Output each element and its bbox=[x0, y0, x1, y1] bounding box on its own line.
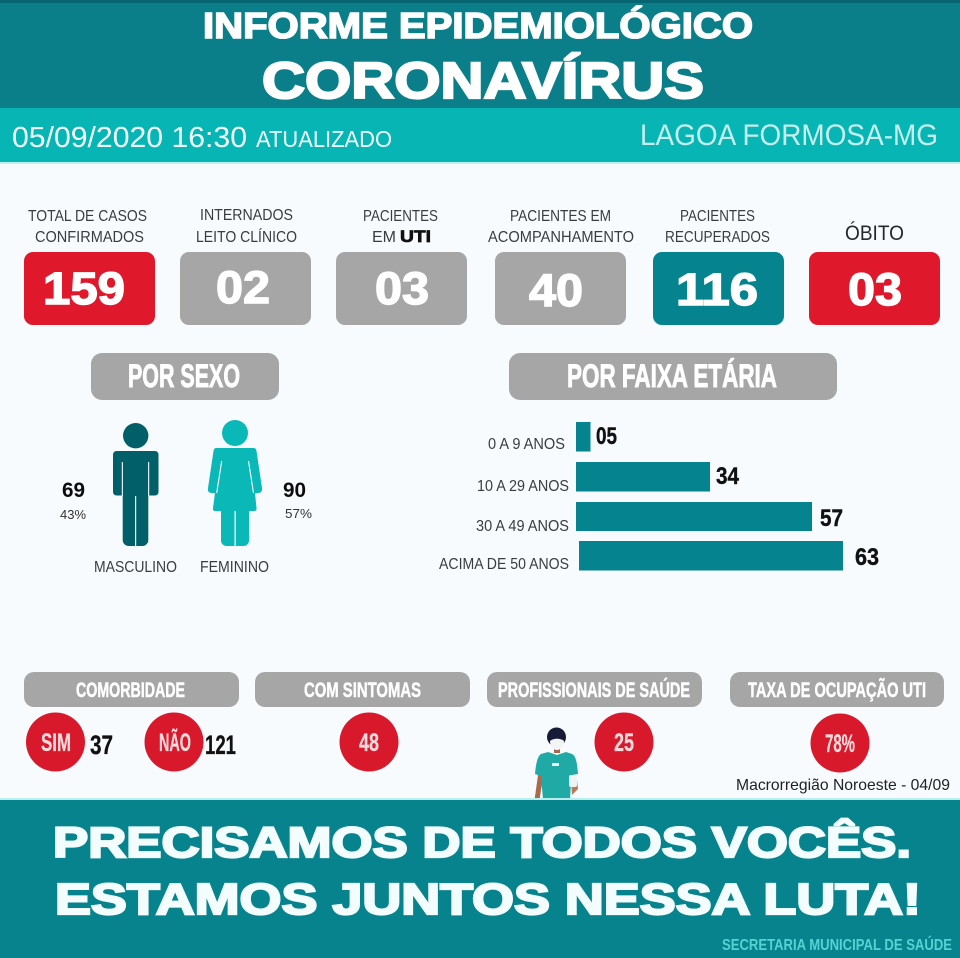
date and location strip bbox=[0, 108, 960, 164]
male counts bbox=[60, 479, 86, 522]
panel: profissionais de saúde bbox=[487, 672, 702, 772]
bar: 30 a 49 anos: 30 A 49 ANOS bbox=[476, 518, 569, 535]
male counts: 69 bbox=[62, 479, 85, 502]
panel: pacientes em UTI bbox=[336, 208, 467, 325]
panel: pacientes em UTI: 03 bbox=[375, 263, 429, 314]
bar chart: age groups bbox=[439, 422, 879, 573]
female counts bbox=[283, 479, 312, 521]
icon: male figure bbox=[113, 423, 158, 546]
panel: pacientes em UTI: UTI bbox=[400, 227, 431, 246]
panel: comorbidade: 37 bbox=[90, 730, 113, 760]
bar: acima de 50 anos bbox=[439, 541, 879, 573]
heading: por sexo bbox=[91, 353, 279, 400]
bar: 0 a 9 anos bbox=[488, 422, 617, 453]
panel: óbito bbox=[809, 222, 940, 325]
panel: comorbidade: 121 bbox=[205, 730, 236, 760]
panel: pacientes em UTI: PACIENTES bbox=[363, 208, 438, 225]
panel: recuperados: 116 bbox=[676, 264, 758, 315]
bar: 10 a 29 anos: 34 bbox=[716, 463, 740, 490]
panel: total de casos: CONFIRMADOS bbox=[35, 229, 144, 246]
panel: comorbidade: NÃO bbox=[159, 727, 191, 757]
panel: internados: INTERNADOS bbox=[200, 207, 293, 224]
header band bbox=[0, 0, 960, 109]
panel: recuperados bbox=[653, 208, 784, 325]
panel: comorbidade bbox=[24, 672, 239, 772]
panel: com sintomas: COM SINTOMAS bbox=[304, 679, 421, 702]
panel: internados: LEITO CLÍNICO bbox=[196, 227, 297, 246]
panel: comorbidade: SIM bbox=[41, 729, 71, 757]
panel: taxa de ocupação UTI bbox=[730, 672, 950, 794]
bar: 30 a 49 anos: 57 bbox=[820, 505, 843, 532]
panel: profissionais de saúde: PROFISSIONAIS DE SAÚDE bbox=[498, 678, 690, 702]
heading: por faixa etária: POR FAIXA ETÁRIA bbox=[567, 358, 777, 394]
male counts: 43% bbox=[60, 507, 86, 522]
panel: pacientes em UTI: EM bbox=[372, 229, 396, 246]
panel: em acompanhamento: PACIENTES EM bbox=[510, 208, 611, 225]
panel: total de casos bbox=[24, 208, 155, 325]
panel: comorbidade: COMORBIDADE bbox=[76, 679, 185, 702]
bar: 10 a 29 anos bbox=[477, 462, 740, 495]
slogan line 1: PRECISAMOS DE TODOS VOCÊS. bbox=[53, 818, 911, 867]
heading: por sexo: POR SEXO bbox=[128, 358, 240, 394]
label: masculino: MASCULINO bbox=[94, 559, 177, 576]
panel: em acompanhamento: 40 bbox=[529, 265, 583, 316]
bar: 0 a 9 anos: 0 A 9 ANOS bbox=[488, 436, 565, 453]
panel: internados: 02 bbox=[216, 262, 270, 313]
title: informe epidemiológico: INFORME EPIDEMIOLÓGICO bbox=[203, 4, 753, 46]
female counts: 90 bbox=[283, 479, 306, 502]
label: feminino: FEMININO bbox=[200, 559, 269, 576]
panel: total de casos: TOTAL DE CASOS bbox=[28, 208, 147, 225]
panel: óbito: ÓBITO bbox=[845, 222, 904, 245]
panel: com sintomas bbox=[255, 672, 470, 772]
panel: taxa de ocupação UTI: 78% bbox=[825, 730, 855, 758]
panel: em acompanhamento: ACOMPANHAMENTO bbox=[488, 229, 634, 246]
note: macrorregião: Macrorregião Noroeste - 04/09 bbox=[736, 777, 950, 794]
bar: 30 a 49 anos bbox=[476, 502, 843, 535]
panel: recuperados: RECUPERADOS bbox=[665, 229, 770, 246]
female counts: 57% bbox=[285, 506, 312, 521]
location: LAGOA FORMOSA-MG bbox=[640, 119, 938, 152]
update date: 05/09/2020 16:30 bbox=[12, 122, 247, 154]
panel: recuperados: PACIENTES bbox=[680, 208, 755, 225]
panel: internados bbox=[180, 207, 311, 325]
panel: profissionais de saúde: 25 bbox=[614, 729, 634, 757]
title: coronavírus: CORONAVÍRUS bbox=[262, 52, 704, 109]
icon: health worker bbox=[534, 728, 578, 800]
footer band bbox=[0, 798, 960, 958]
bar: 0 a 9 anos: 05 bbox=[596, 423, 617, 450]
panel: total de casos: 159 bbox=[43, 263, 125, 314]
bar: acima de 50 anos: 63 bbox=[855, 544, 879, 571]
updated label: ATUALIZADO bbox=[256, 126, 392, 152]
icon: female figure bbox=[208, 420, 262, 546]
slogan line 2: ESTAMOS JUNTOS NESSA LUTA! bbox=[55, 875, 921, 924]
panel: óbito: 03 bbox=[848, 264, 902, 315]
bar: 10 a 29 anos: 10 A 29 ANOS bbox=[477, 478, 569, 495]
heading: por faixa etária bbox=[509, 353, 837, 400]
panel: em acompanhamento bbox=[488, 208, 634, 325]
bar: acima de 50 anos: ACIMA DE 50 ANOS bbox=[439, 556, 569, 573]
panel: com sintomas: 48 bbox=[359, 729, 379, 757]
